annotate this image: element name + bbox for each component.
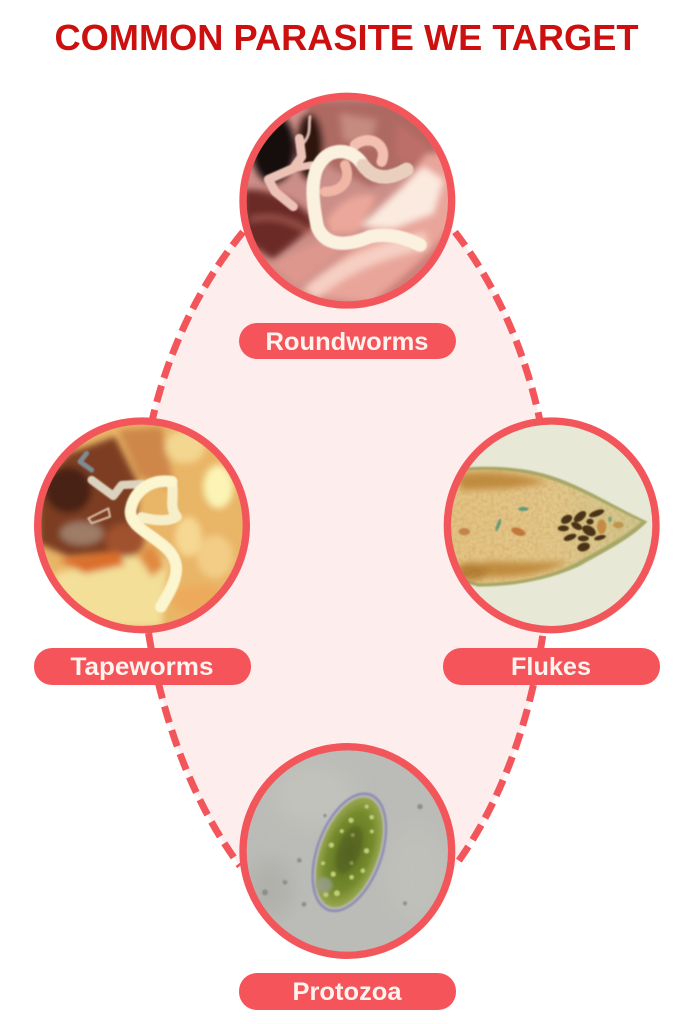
dashed lens background [140,150,551,900]
panel: flukes [443,420,660,685]
icon: fluke photo [445,420,658,630]
icon: roundworm photo [243,96,457,307]
label: Flukes: Flukes [511,653,591,681]
icon: tapeworm photo [38,420,248,630]
label: Tapeworms [34,648,251,685]
title: COMMON PARASITE WE TARGET [54,17,638,58]
label: Tapeworms: Tapeworms [70,653,214,681]
label: Protozoa [239,973,456,1010]
label: Protozoa: Protozoa [292,978,403,1006]
panel: protozoa [239,747,456,1010]
label: Roundworms: Roundworms [266,328,428,356]
label: Roundworms [239,323,456,359]
label: Flukes [443,648,660,685]
icon: protozoa photo [243,747,453,958]
panel: tapeworms [34,420,251,685]
panel: roundworms [239,96,457,359]
